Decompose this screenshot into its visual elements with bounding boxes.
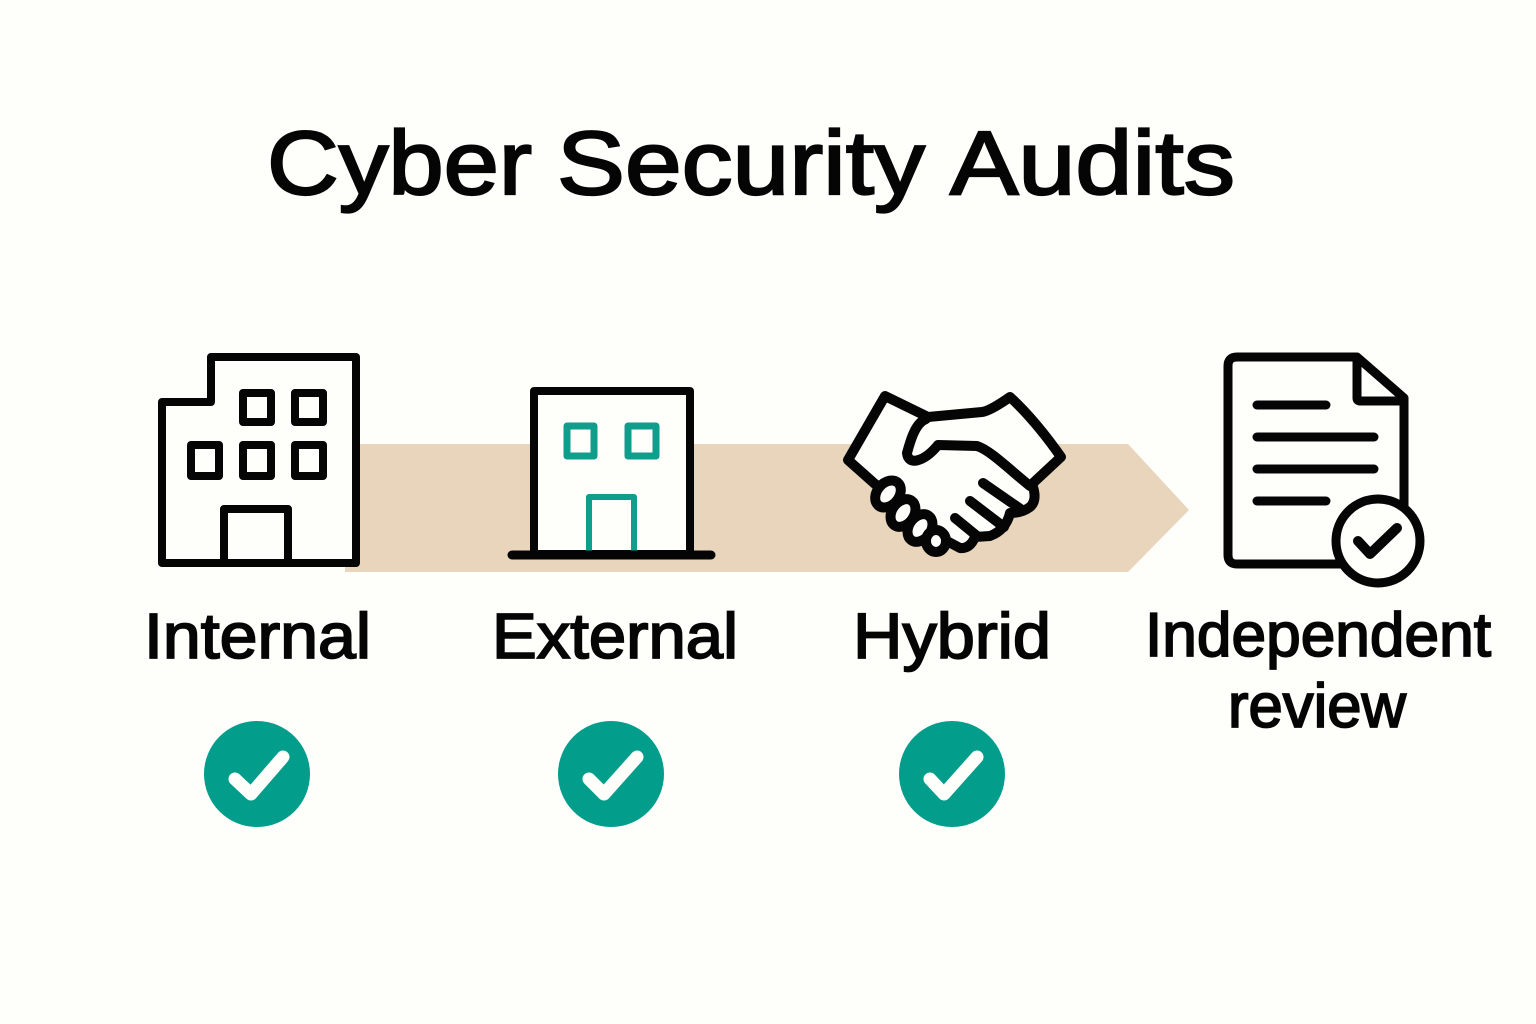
icon: audit document with check xyxy=(1228,357,1420,583)
label: Independent review: review xyxy=(1228,672,1406,741)
icon: check badge internal xyxy=(204,721,310,827)
label: Independent review xyxy=(1145,601,1491,741)
title: Security xyxy=(557,114,925,214)
label: Independent review: Independent xyxy=(1145,601,1491,670)
icon: handshake xyxy=(848,396,1061,552)
icon: internal office building xyxy=(162,357,356,563)
title: Cyber xyxy=(267,114,532,214)
title: Audits xyxy=(950,114,1235,214)
label: Internal: Internal xyxy=(144,600,371,672)
icon: external building xyxy=(512,391,711,555)
icon: check badge external xyxy=(558,721,664,827)
label: External: External xyxy=(492,600,738,672)
label: Hybrid: Hybrid xyxy=(853,600,1051,672)
process arrow xyxy=(345,444,1189,572)
icon: check badge hybrid xyxy=(899,721,1005,827)
title xyxy=(267,114,1235,214)
